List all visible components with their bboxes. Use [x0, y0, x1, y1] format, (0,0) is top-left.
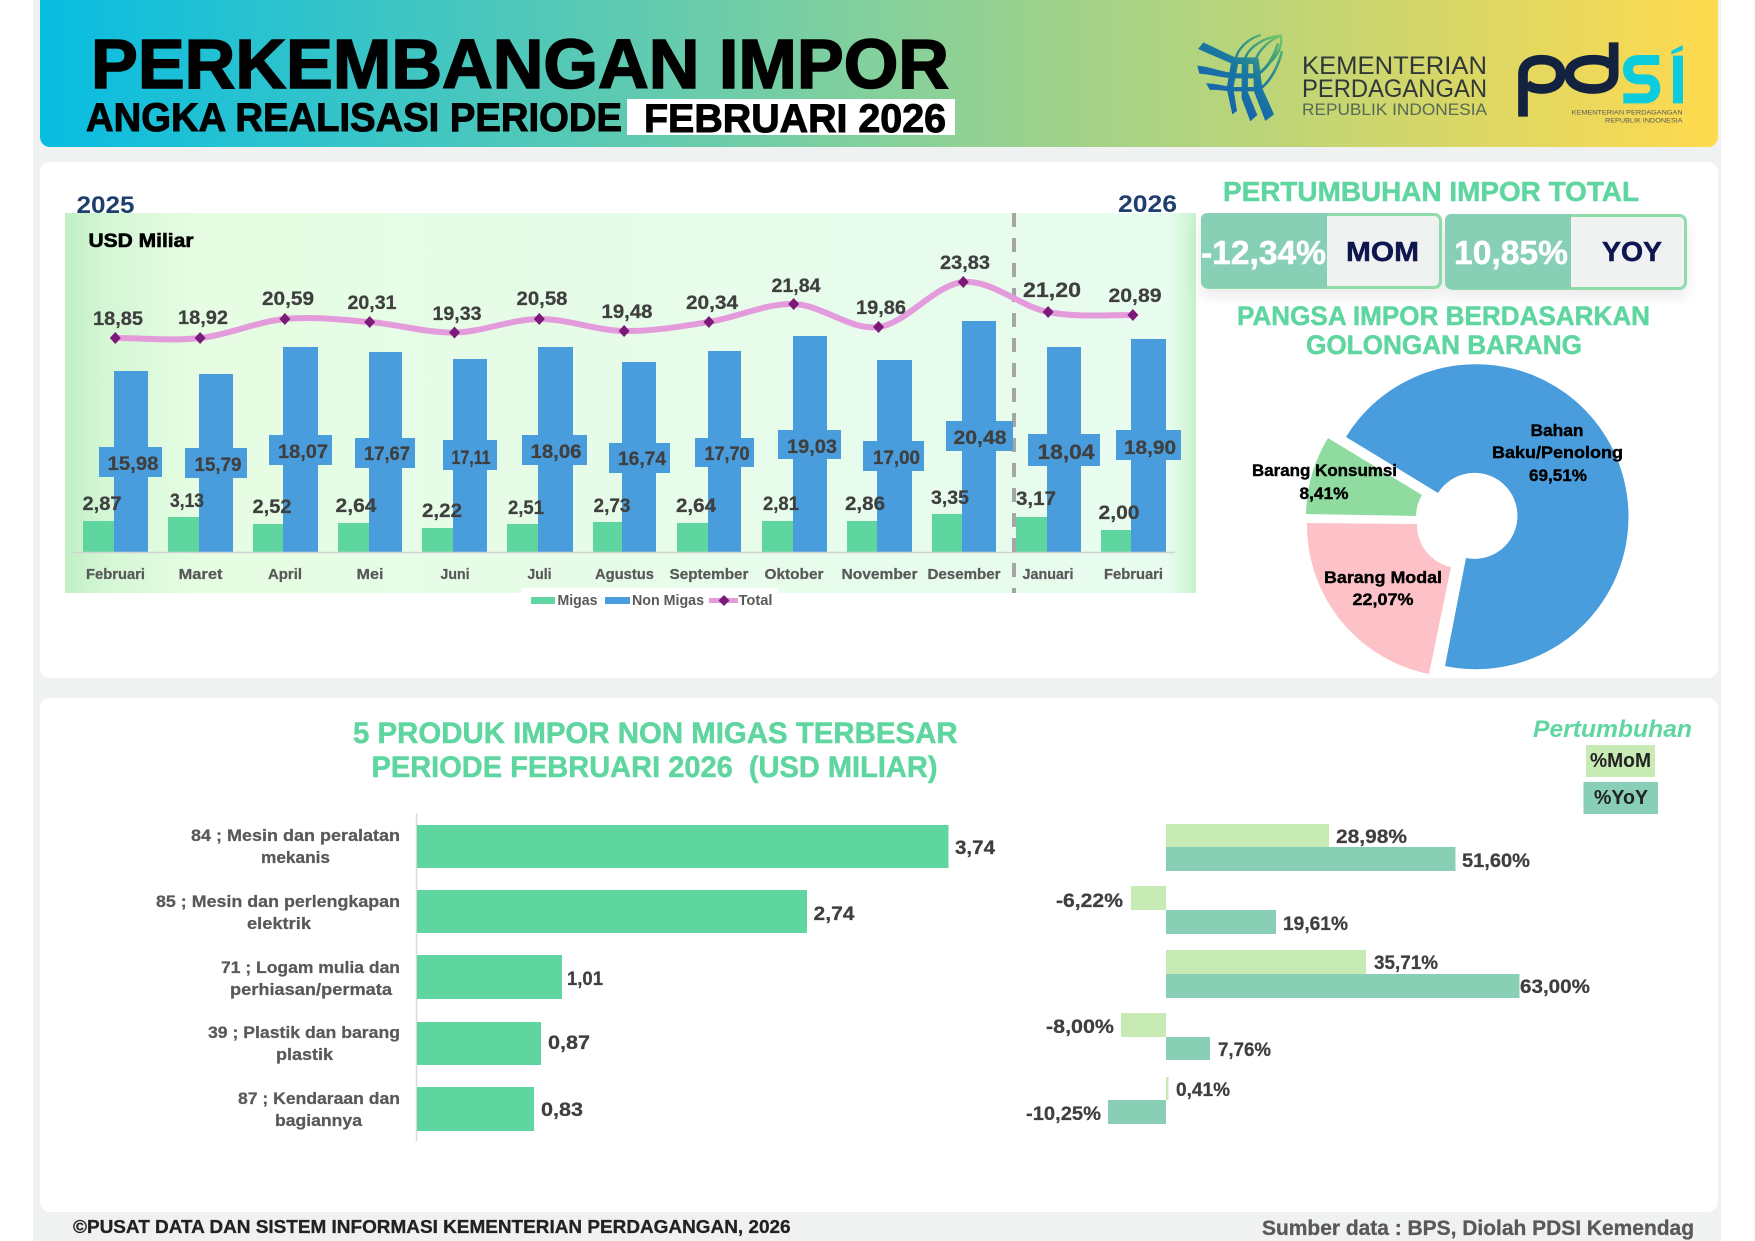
category labels: elektrik: [247, 914, 312, 933]
total value labels: 21,84: [772, 276, 821, 297]
migas value labels: 2,81: [763, 494, 799, 515]
migas value labels: 2,00: [1098, 503, 1140, 524]
logo text: Kementerian Perdagangan: PERDAGANGAN: [1302, 75, 1487, 103]
category labels: perhiasan/permata: [230, 980, 393, 999]
combo chart: migas, non migas, total: [65, 191, 1196, 614]
non migas value labels: [108, 428, 1176, 476]
total value labels: [93, 253, 1162, 330]
heading: import share: GOLONGAN BARANG: [1306, 330, 1582, 360]
growth value labels: 19,61%: [1283, 914, 1348, 935]
month labels: [86, 566, 1163, 583]
card: MoM growth: MOM: [1346, 236, 1419, 267]
panel: top five products: [40, 698, 1718, 1212]
month labels: September: [670, 566, 749, 583]
month labels: Oktober: [764, 566, 824, 583]
bars: [417, 825, 948, 1131]
growth value labels: [1026, 827, 1590, 1125]
label: barang konsumsi: [1252, 461, 1397, 503]
category labels: 71 ; Logam mulia dan: [221, 958, 400, 977]
year divider: [1012, 213, 1016, 593]
card: MoM growth: -12,34%: [1201, 234, 1326, 271]
period badge: FEBRUARI 2026: [644, 97, 946, 141]
non migas value labels: 18,90: [1124, 438, 1176, 459]
bar chart: product growth: [1026, 824, 1590, 1125]
migas value labels: 2,73: [594, 496, 630, 517]
legend: growth: %MoM: [1590, 750, 1651, 772]
category labels: 87 ; Kendaraan dan: [238, 1089, 400, 1108]
non migas value labels: 15,98: [108, 454, 158, 475]
migas value labels: 2,22: [422, 501, 462, 522]
migas value labels: 2,86: [845, 494, 885, 515]
heading: top five non-oil products: PERIODE FEBRUARI 2026 (USD MILIAR): [372, 751, 938, 784]
category labels: plastik: [276, 1045, 334, 1064]
migas value labels: 2,51: [508, 498, 544, 519]
header banner: [40, 0, 1718, 147]
donut chart: share by goods category: [1252, 364, 1629, 674]
slice: bahan baku: [1346, 364, 1629, 669]
non migas value labels: 18,04: [1038, 441, 1095, 464]
chart legend: Migas: [558, 593, 598, 609]
card: YoY growth: YOY: [1602, 236, 1662, 267]
slice: barang modal: [1307, 523, 1451, 674]
total value labels: 20,58: [516, 289, 568, 310]
non migas value labels: 17,70: [704, 444, 750, 465]
value labels: 1,01: [567, 969, 603, 990]
total value labels: 18,85: [93, 309, 143, 330]
label: barang konsumsi: 8,41%: [1300, 484, 1348, 503]
unit label: USD Miliar: [88, 231, 194, 252]
non migas value labels: 17,00: [873, 448, 920, 469]
growth value labels: -8,00%: [1046, 1017, 1114, 1038]
value labels: [541, 838, 995, 1121]
month labels: Januari: [1022, 566, 1074, 583]
title: PERKEMBANGAN IMPOR: [91, 25, 949, 103]
growth value labels: 28,98%: [1336, 827, 1407, 848]
total value labels: 18,92: [178, 308, 228, 329]
total value labels: 19,33: [432, 304, 482, 325]
total value labels: 20,59: [262, 289, 314, 310]
category labels: 84 ; Mesin dan peralatan: [191, 826, 400, 845]
legend: growth: [1533, 716, 1692, 814]
value labels: 2,74: [814, 904, 855, 925]
migas value labels: 3,35: [931, 488, 969, 509]
non migas value labels: 20,48: [954, 428, 1006, 449]
subtitle: ANGKA REALISASI PERIODE: [86, 96, 622, 140]
heading: import share: PANGSA IMPOR BERDASARKAN: [1237, 301, 1650, 331]
non migas value labels: 18,07: [278, 442, 328, 463]
slice: barang konsumsi: [1306, 438, 1422, 516]
month labels: April: [268, 566, 302, 583]
heading: import share: [1237, 301, 1650, 360]
label: bahan baku: [1492, 421, 1623, 485]
legend: growth: Pertumbuhan: [1533, 716, 1692, 743]
logo: PDSI: KEMENTERIAN PERDAGANGAN: [1572, 109, 1683, 116]
panel: monthly import chart and growth: [40, 162, 1718, 678]
year label 2025: 2025: [76, 192, 134, 219]
heading: top five non-oil products: 5 PRODUK IMPOR NON MIGAS TERBESAR: [353, 717, 958, 750]
heading: total import growth: PERTUMBUHAN IMPOR TOTAL: [1223, 176, 1639, 207]
label: barang modal: [1324, 568, 1442, 609]
bars: migas: [83, 514, 1131, 552]
logo: Kementerian Perdagangan emblem: [1197, 35, 1282, 121]
growth value labels: 0,41%: [1176, 1080, 1230, 1101]
non migas value labels: 16,74: [618, 449, 666, 470]
card: MoM growth: [1201, 213, 1440, 288]
month labels: Februari: [86, 566, 145, 583]
category labels: mekanis: [261, 848, 330, 867]
label: bahan baku: Baku/Penolong: [1492, 443, 1623, 462]
migas value labels: 2,87: [82, 494, 122, 515]
month labels: Februari: [1104, 566, 1163, 583]
non migas value labels: 17,67: [364, 444, 410, 465]
migas value labels: 3,17: [1016, 489, 1056, 510]
growth value labels: 7,76%: [1218, 1040, 1271, 1061]
growth value labels: 35,71%: [1374, 953, 1438, 974]
total value labels: 20,89: [1108, 286, 1162, 307]
category labels: 39 ; Plastik dan barang: [208, 1023, 400, 1042]
bar chart: top five products value: [156, 813, 995, 1141]
month labels: Juni: [440, 566, 470, 583]
non migas value labels: 18,06: [530, 442, 582, 463]
total value labels: 19,48: [602, 302, 652, 323]
total value labels: 20,34: [686, 293, 738, 314]
category labels: 85 ; Mesin dan perlengkapan: [156, 892, 400, 911]
card: YoY growth: [1445, 214, 1686, 289]
value labels: 0,83: [541, 1100, 583, 1121]
chart legend: Non Migas: [632, 593, 704, 609]
chart legend: Total: [738, 593, 772, 609]
migas value labels: 2,64: [676, 496, 716, 517]
label: barang modal: 22,07%: [1352, 590, 1414, 609]
non migas value labels: 19,03: [787, 437, 837, 458]
heading: top five non-oil products: [353, 717, 958, 784]
footer: copyright: ©PUSAT DATA DAN SISTEM INFORMASI KEMENTERIAN PERDAGANGAN, 2026: [73, 1216, 791, 1237]
non migas value labels: 17,11: [452, 448, 491, 469]
label: barang konsumsi: Barang Konsumsi: [1252, 461, 1397, 480]
non migas value labels: 15,79: [194, 455, 242, 476]
chart legend: [531, 593, 772, 609]
logo text: Kementerian Perdagangan: [1302, 52, 1487, 119]
label: bahan baku: 69,51%: [1529, 466, 1587, 485]
footer: data source: Sumber data : BPS, Diolah PDSI Kemendag: [1262, 1217, 1694, 1240]
logo text: Kementerian Perdagangan: KEMENTERIAN: [1302, 52, 1487, 80]
logo: PDSI: REPUBLIK INDONESIA: [1605, 117, 1683, 124]
total value labels: 19,86: [856, 298, 906, 319]
total value labels: 23,83: [940, 253, 990, 274]
label: barang modal: Barang Modal: [1324, 568, 1442, 587]
migas value labels: [82, 488, 1140, 524]
bars: MoM: [1121, 824, 1366, 1100]
migas value labels: 2,52: [252, 497, 292, 518]
logo text: Kementerian Perdagangan: REPUBLIK INDONESIA: [1302, 101, 1487, 119]
migas value labels: 3,13: [170, 491, 204, 512]
month labels: Mei: [356, 566, 384, 583]
category labels: bagiannya: [275, 1111, 363, 1130]
month labels: Desember: [928, 566, 1001, 583]
label: bahan baku: Bahan: [1530, 421, 1584, 440]
migas value labels: 2,64: [336, 496, 377, 517]
legend background: [521, 588, 778, 614]
growth value labels: 51,60%: [1462, 851, 1530, 872]
value labels: 3,74: [955, 838, 995, 859]
total value labels: 21,20: [1023, 279, 1081, 302]
legend: growth: %YoY: [1594, 787, 1649, 809]
bars: non migas: [114, 321, 1166, 552]
category labels: [156, 826, 400, 1130]
axis: [73, 552, 1175, 554]
growth value labels: 63,00%: [1520, 977, 1590, 998]
value labels: 0,87: [548, 1033, 590, 1054]
non migas label boxes: [99, 421, 1181, 478]
total value labels: 20,31: [348, 293, 397, 314]
total markers: [110, 276, 1138, 344]
month labels: Juli: [528, 566, 552, 583]
card: YoY growth: 10,85%: [1454, 234, 1568, 271]
month labels: Maret: [178, 566, 223, 583]
growth value labels: -6,22%: [1056, 891, 1123, 912]
growth value labels: -10,25%: [1026, 1104, 1101, 1125]
logo: PDSI: [1523, 42, 1683, 124]
bars: YoY: [1108, 847, 1520, 1124]
total line: [115, 282, 1133, 339]
year label 2026: 2026: [1118, 191, 1177, 218]
chart background: [65, 213, 1196, 593]
month labels: Agustus: [595, 566, 654, 583]
month labels: November: [842, 566, 918, 583]
